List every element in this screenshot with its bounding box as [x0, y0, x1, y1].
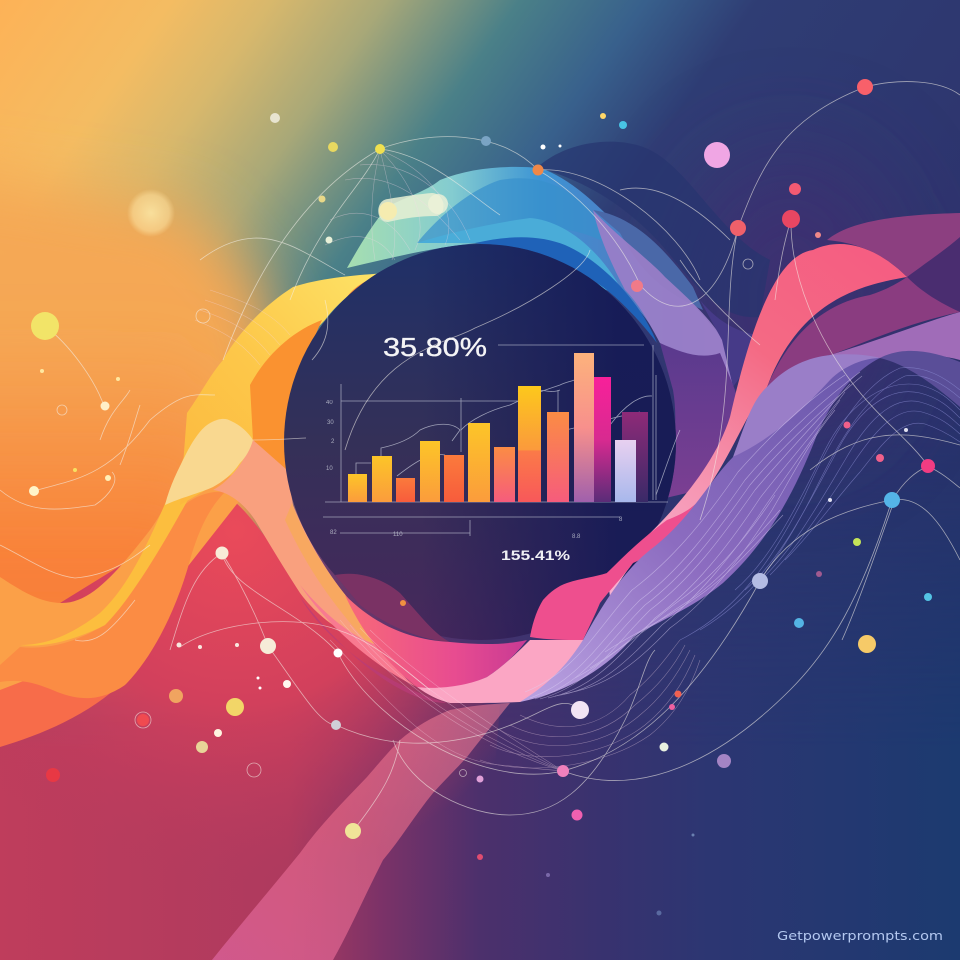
salmon fold — [213, 440, 383, 647]
watermark: Getpowerprompts.com — [777, 928, 943, 943]
capsule highlight — [378, 193, 444, 222]
bar 11 — [594, 377, 611, 502]
pale pink swirl — [417, 620, 615, 703]
small nodes — [29, 113, 935, 916]
axis micro labels: 8 — [619, 517, 623, 523]
lower pink ribbon — [212, 703, 510, 960]
yellow stripe — [20, 370, 250, 646]
bar 2 — [372, 456, 392, 502]
axis micro labels: 8.8 — [572, 534, 581, 540]
deep blue band — [475, 237, 657, 343]
pale violet fold — [593, 210, 733, 387]
bar 8 — [518, 386, 541, 502]
fine arc fan lines — [195, 150, 700, 771]
inner orange fold — [250, 320, 322, 510]
bar 5 — [444, 455, 464, 502]
mauve top right wave — [827, 213, 960, 310]
yellow rising wave — [180, 273, 387, 505]
light orange wave — [0, 385, 290, 690]
pink wave — [607, 244, 907, 597]
coral node — [857, 79, 873, 95]
violet right band — [830, 312, 960, 360]
violet lined wave — [520, 358, 880, 702]
axis micro labels: 110 — [393, 532, 403, 538]
pink orb — [704, 142, 730, 168]
bar 4 — [420, 441, 440, 502]
deep teal wedge — [417, 178, 640, 270]
panel: bar chart — [323, 334, 680, 563]
magenta blob at ring bottom right — [530, 500, 700, 640]
axis micro labels: 30 — [327, 420, 334, 426]
bar 9 — [547, 412, 569, 502]
pale lavender crest — [733, 354, 880, 457]
axis micro labels: 40 — [326, 400, 333, 406]
dark navy swoosh — [540, 142, 770, 317]
salmon lower band — [300, 585, 417, 687]
secondary value: 155.41% — [501, 548, 570, 563]
orange dab on ring — [347, 273, 388, 310]
panel: flowing waves behind the chart — [0, 142, 770, 960]
purple back bar — [622, 412, 648, 502]
yellow node — [31, 312, 59, 340]
blue violet corner — [880, 351, 960, 407]
bar 6 — [468, 423, 490, 502]
blue-grey fold — [593, 210, 703, 310]
red lower left wave — [0, 498, 500, 960]
coral magenta band — [345, 595, 527, 688]
amber stripe lower left of circle — [285, 503, 383, 647]
panel: foreground waves — [212, 213, 960, 960]
red-orange base wave — [0, 490, 240, 747]
large glow orb — [127, 189, 175, 237]
bar 3 — [396, 478, 415, 502]
top arc band — [347, 167, 733, 387]
orange wave — [0, 492, 225, 698]
fine contour lines on violet wave — [525, 372, 862, 699]
dark purple corner — [907, 237, 960, 312]
headline value: 35.80% — [383, 334, 487, 362]
indigo fold by pink wave — [700, 300, 762, 387]
bar 7 — [494, 447, 515, 502]
mauve below pink — [767, 277, 960, 387]
axis micro labels: 82 — [330, 530, 337, 536]
bar 10 — [574, 353, 594, 502]
rose shadow band — [300, 597, 447, 703]
fine contour lines in dark right wave — [680, 368, 960, 640]
panel: dark circle behind chart — [284, 244, 676, 640]
pale peach crest — [165, 419, 253, 505]
chart axis and grid lines — [323, 345, 680, 536]
network lines — [0, 82, 960, 831]
axis micro labels: 2 — [331, 439, 335, 445]
right purple fold — [657, 343, 737, 500]
cyan band — [417, 218, 627, 300]
bar 12 — [615, 440, 636, 502]
bar 1 — [348, 474, 367, 502]
axis micro labels — [326, 400, 623, 540]
bars — [348, 353, 648, 502]
axis micro labels: 10 — [326, 466, 333, 472]
purple arc beneath chart — [335, 574, 450, 642]
